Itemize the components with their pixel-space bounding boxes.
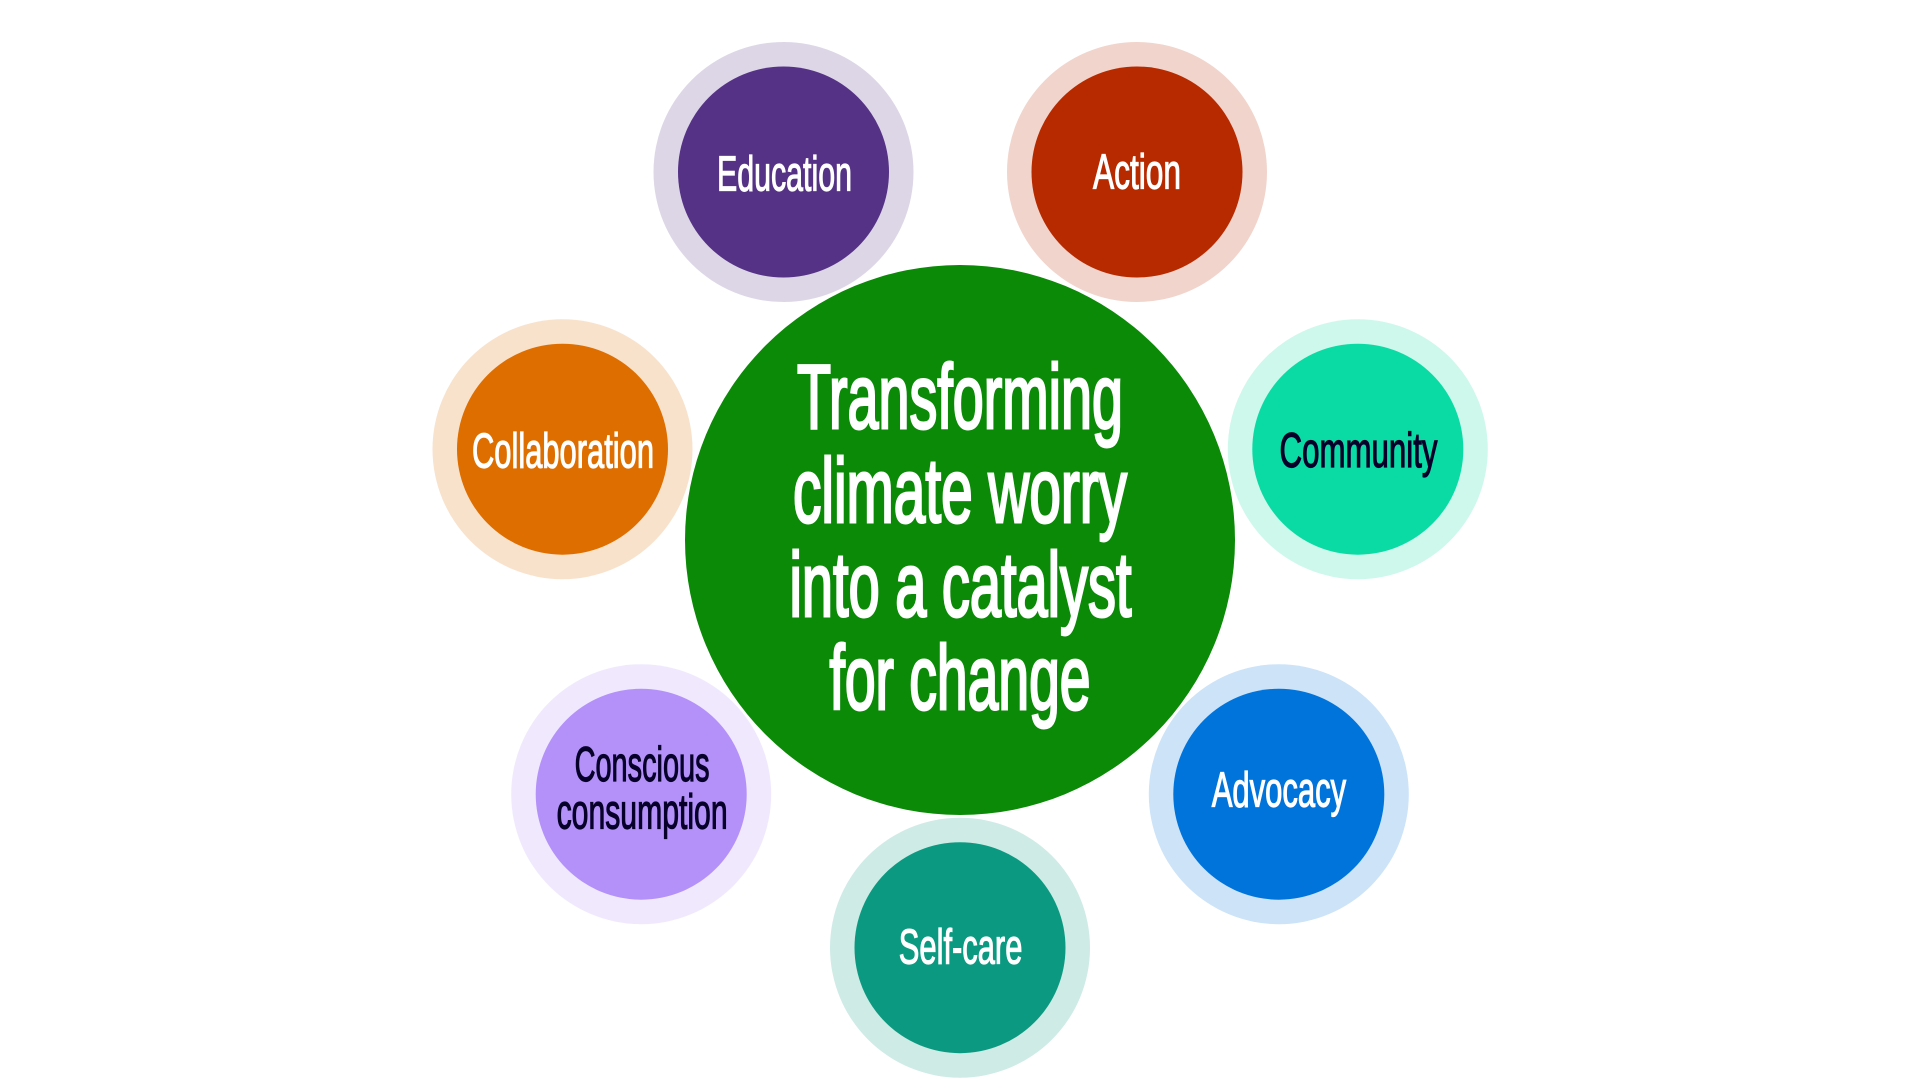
node: Education: Education — [717, 148, 852, 202]
central circle: main message: climate worry — [793, 441, 1127, 542]
node: Education — [654, 42, 914, 302]
node: Conscious consumption: Conscious — [575, 738, 710, 792]
central circle: main message: for change — [830, 628, 1090, 729]
node: Advocacy: Advocacy — [1212, 764, 1347, 818]
node: Action: Action — [1093, 146, 1181, 200]
node: Conscious consumption — [511, 664, 771, 924]
central circle: main message: Transforming — [797, 347, 1123, 448]
node: Advocacy — [1149, 664, 1409, 924]
central circle: main message: into a catalyst — [790, 535, 1132, 636]
node: Conscious consumption: consumption — [557, 786, 728, 840]
node: Self-care: Self-care — [899, 920, 1022, 974]
node: Collaboration: Collaboration — [472, 424, 654, 478]
node: Community: Community — [1280, 424, 1438, 478]
node: Self-care — [830, 818, 1090, 1078]
node: Community — [1228, 319, 1488, 579]
central circle: main message — [685, 265, 1235, 815]
node: Action — [1007, 42, 1267, 302]
node: Collaboration — [432, 319, 692, 579]
